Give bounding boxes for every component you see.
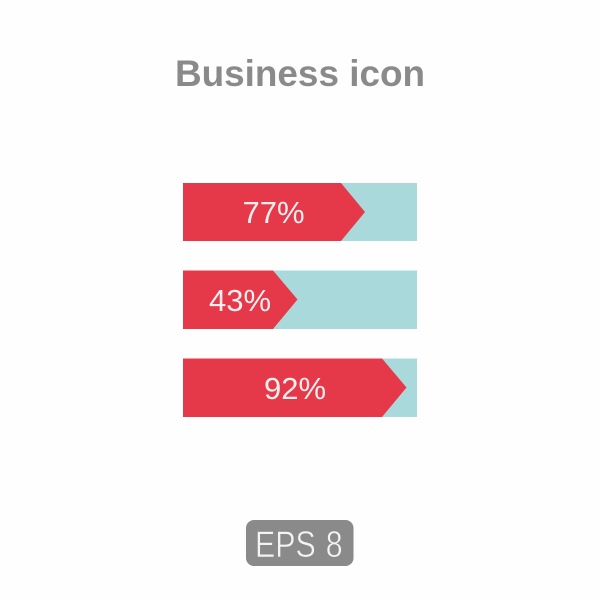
badge background (246, 520, 354, 566)
title: Business icon (175, 53, 425, 94)
bar track: 77% (183, 183, 417, 241)
value label: 92%: 92% (264, 371, 326, 406)
bar fill arrow: 77% (183, 183, 365, 241)
bar: 77% (183, 183, 417, 241)
badge label: EPS 8 (255, 524, 343, 566)
value label: 43%: 43% (209, 283, 271, 318)
badge: EPS 8 (246, 520, 354, 566)
value label: 77%: 77% (242, 195, 305, 230)
bar track: 92% (183, 358, 417, 417)
bar: 92% (183, 358, 417, 417)
bar fill arrow: 92% (183, 358, 406, 417)
bar fill arrow: 43% (183, 270, 298, 329)
bar: 43% (183, 270, 417, 329)
bar track: 43% (183, 270, 417, 329)
